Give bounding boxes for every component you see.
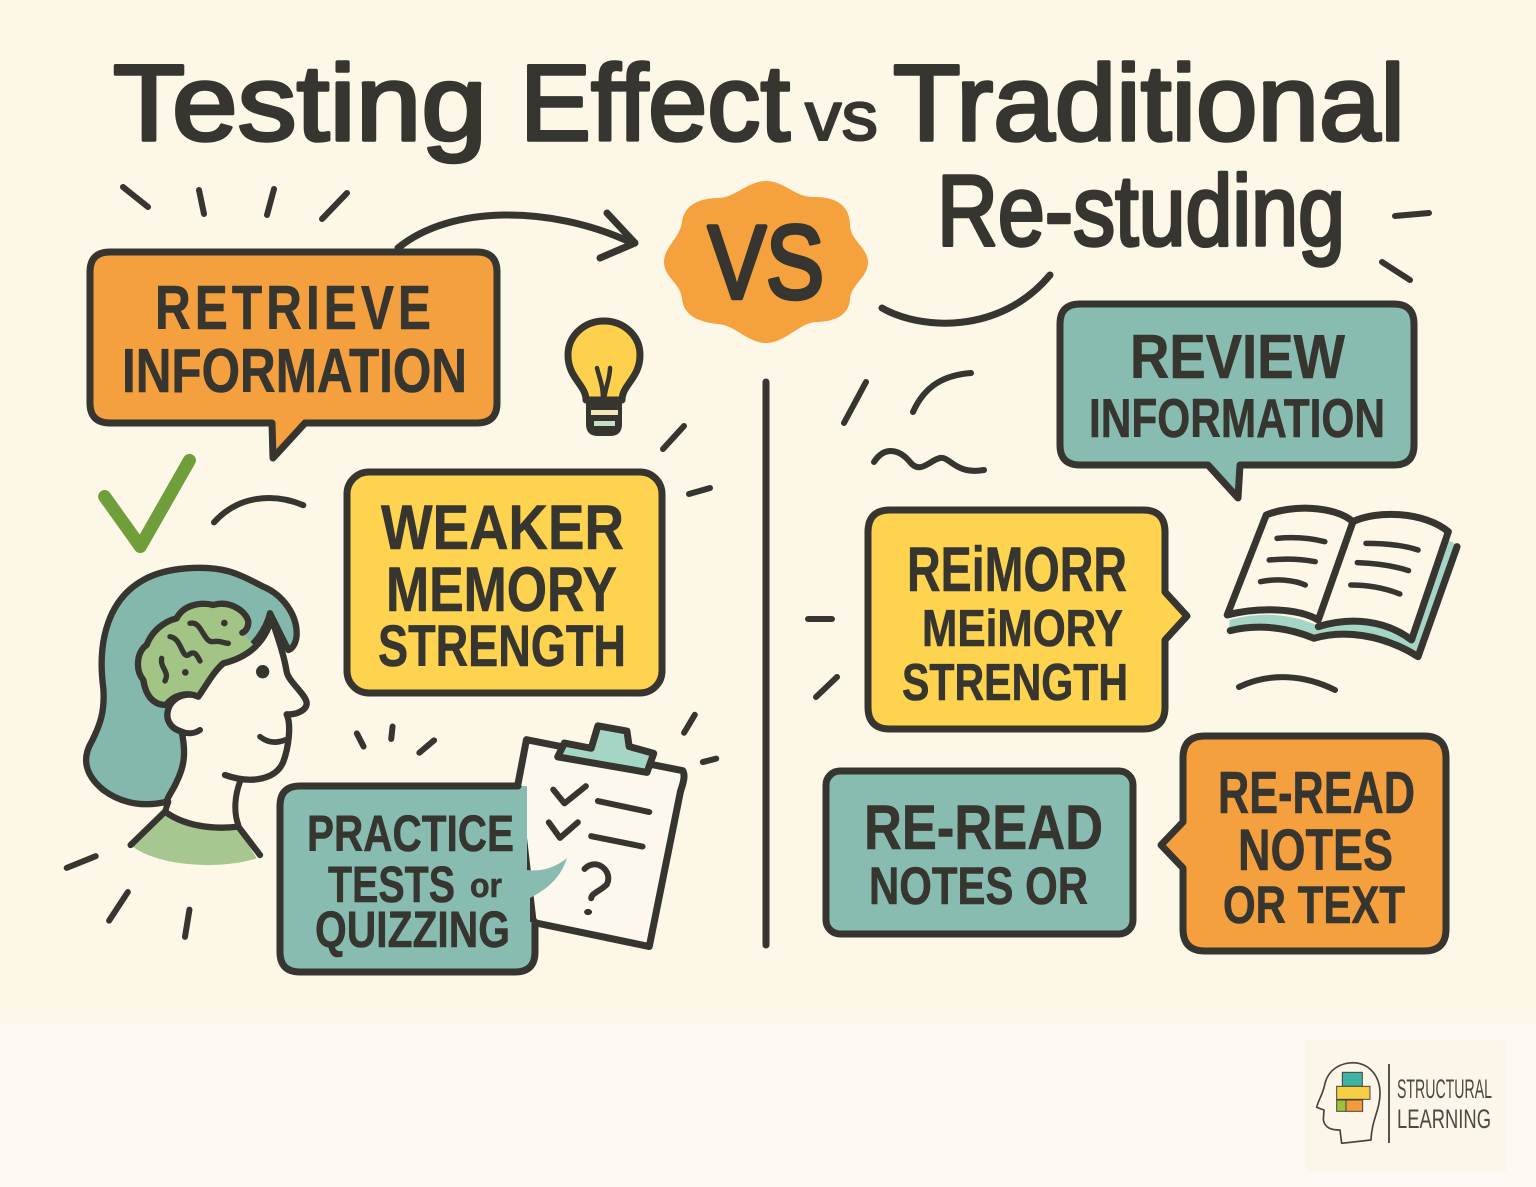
speech bubble: retrieve information: RETRIEVE: [155, 274, 435, 343]
face outline: [225, 613, 307, 780]
speech bubble: re-read notes or text: NOTES: [1238, 818, 1393, 883]
speech bubble: remorr memory strength: MEiMORY: [922, 600, 1123, 658]
speech bubble: retrieve information: [90, 252, 497, 458]
speech box: practice tests or quizzing: or: [470, 867, 502, 905]
speech box: weaker memory strength: STRENGTH: [378, 614, 626, 679]
speech box: weaker memory strength: [347, 472, 662, 693]
speech box: re-read notes or: NOTES OR: [869, 857, 1088, 916]
logo: Structural Learning: [1307, 1040, 1506, 1172]
doodles around person and clipboard: [67, 460, 716, 947]
speech bubble: review information: REVIEW: [1130, 323, 1345, 392]
shirt: [131, 813, 257, 865]
speech box: practice tests or quizzing: PRACTICE: [307, 805, 514, 862]
VS badge: VS: [708, 205, 824, 321]
icon: lightbulb: [568, 321, 640, 436]
eye: [256, 665, 269, 678]
speech bubble: re-read notes or text: OR TEXT: [1223, 876, 1405, 935]
rays around person: [67, 856, 189, 937]
arc below book: [1239, 677, 1335, 690]
speech box: weaker memory strength: WEAKER: [381, 493, 624, 563]
speech bubble: re-read notes or text: RE-READ: [1218, 760, 1415, 826]
dashes left of remorr bubble: [808, 619, 837, 697]
shoulder lines: [131, 812, 260, 855]
speech bubble: remorr memory strength: [868, 510, 1187, 729]
title: Effect: [520, 42, 790, 163]
speech box: weaker memory strength: MEMORY: [386, 555, 617, 625]
ear and neck: [165, 730, 240, 825]
title: Traditional: [893, 42, 1405, 163]
arrow: retrieve to VS: [398, 213, 635, 258]
decorative rays top left: [123, 187, 347, 219]
icon: green check mark: [105, 460, 189, 547]
speech box: practice tests or quizzing: TESTS: [328, 856, 455, 913]
brain: [138, 604, 272, 705]
swoosh and rays top right: [882, 213, 1429, 323]
speech box: re-read notes or: [826, 771, 1133, 934]
centre divider: [762, 382, 770, 945]
dashes near lightbulb: [663, 426, 710, 494]
smile: [260, 737, 285, 742]
title: Testing: [113, 42, 487, 163]
title: vs: [805, 77, 878, 155]
title: Re-studing: [937, 155, 1345, 267]
speech box: practice tests or quizzing: QUIZZING: [315, 901, 510, 958]
speech box: practice tests or quizzing: [280, 786, 567, 972]
speech bubble: review information: INFORMATION: [1089, 387, 1385, 449]
logo: Structural Learning: LEARNING: [1397, 1104, 1491, 1134]
speech box: re-read notes or: RE-READ: [864, 793, 1103, 863]
doodles left of review bubble: [844, 373, 984, 471]
icon: head outline with blocks: [1317, 1063, 1380, 1143]
speech bubble: re-read notes or text: [1161, 736, 1446, 951]
title: [113, 42, 1405, 267]
person with brain illustration: [86, 568, 307, 865]
hair: [86, 568, 297, 804]
speech bubble: remorr memory strength: REiMORR: [907, 535, 1127, 605]
icon: clipboard: [518, 726, 684, 947]
rays above practice box: [357, 715, 716, 762]
VS badge: [664, 181, 868, 343]
arc above head: [214, 498, 303, 522]
icon: open book: [1227, 508, 1457, 657]
speech bubble: remorr memory strength: STRENGTH: [902, 654, 1128, 712]
speech bubble: review information: [1060, 304, 1414, 498]
speech bubble: retrieve information: INFORMATION: [122, 337, 467, 406]
